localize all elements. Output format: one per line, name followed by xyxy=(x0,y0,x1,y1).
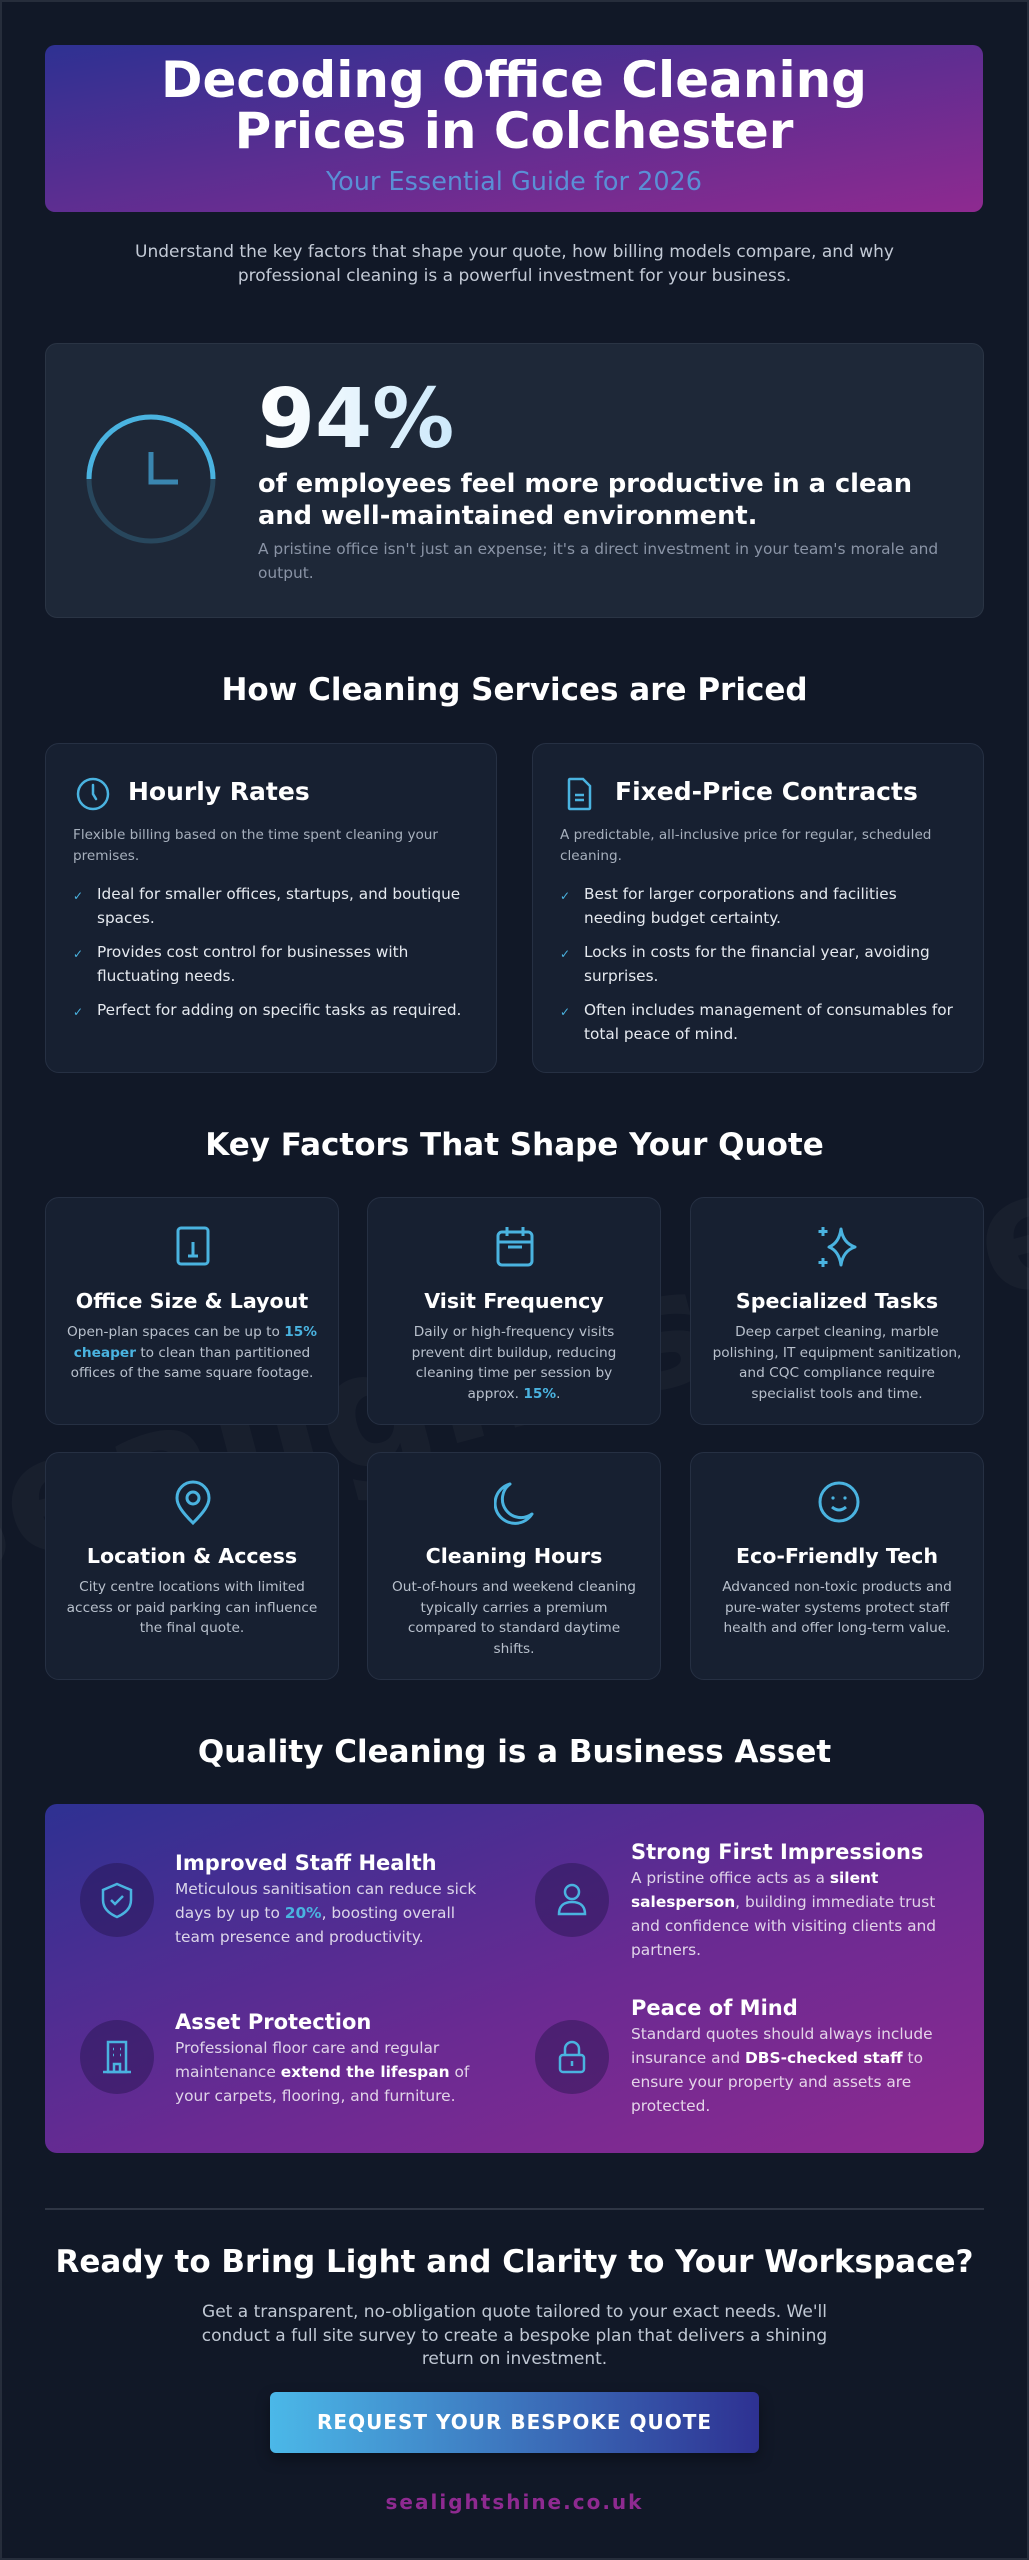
panel: visit frequency: Visit Frequency xyxy=(424,1289,604,1313)
panel: specialized tasks: Deep carpet cleaning, marble xyxy=(735,1324,939,1340)
benefit: peace of mind: insurance and DBS-checked staff to xyxy=(631,2049,923,2067)
panel: fixed-price contracts: ✓ xyxy=(560,889,570,903)
benefit: peace of mind: Peace of Mind xyxy=(631,1996,798,2020)
benefit: staff health: days by up to 20%, boosting overall xyxy=(175,1904,455,1922)
title: Decoding Office Cleaning xyxy=(161,51,867,109)
benefit: first impressions: and confidence with visiting clients and xyxy=(631,1917,936,1935)
panel: specialized tasks: Specialized Tasks xyxy=(736,1289,938,1313)
panel: fixed-price contracts: Often includes management of consumables for xyxy=(584,1001,953,1019)
icon: person xyxy=(535,1863,609,1937)
intro text: Understand the key factors that shape your quote, how billing models compare, and why xyxy=(135,242,894,262)
panel: eco-friendly tech: Eco-Friendly Tech xyxy=(736,1544,938,1568)
title xyxy=(161,51,867,160)
benefit: staff health: Improved Staff Health xyxy=(175,1851,437,1875)
panel: specialized tasks xyxy=(690,1197,984,1425)
panel: location: the final quote. xyxy=(140,1620,244,1636)
panel: hourly rates: ✓ xyxy=(73,889,83,903)
panel: fixed-price contracts: A predictable, all-inclusive price for regular, scheduled xyxy=(560,827,931,843)
CTA text: return on investment. xyxy=(422,2349,607,2369)
panel: visit frequency: prevent dirt buildup, reducing xyxy=(412,1344,616,1360)
panel: hourly rates: fluctuating needs. xyxy=(97,967,235,985)
panel: eco-friendly tech: health and offer long-term value. xyxy=(723,1620,951,1636)
CTA heading: Ready to Bring Light and Clarity to Your Workspace? xyxy=(56,2244,973,2280)
panel: office size: cheaper to clean than partitioned xyxy=(74,1344,310,1360)
panel: cleaning hours: typically carries a premium xyxy=(421,1600,607,1616)
icon: lock xyxy=(535,2020,609,2094)
panel: visit frequency: cleaning time per session by xyxy=(416,1365,612,1381)
icon: smiley xyxy=(818,1482,860,1522)
subtitle: Your Essential Guide for 2026 xyxy=(326,167,702,197)
panel: fixed-price contracts: Locks in costs for the financial year, avoiding xyxy=(584,943,930,961)
CTA button xyxy=(270,2392,759,2453)
benefit: staff health: Meticulous sanitisation can reduce sick xyxy=(175,1880,476,1898)
panel: fixed-price contracts: Best for larger corporations and facilities xyxy=(584,885,897,903)
icon: clock xyxy=(76,778,110,810)
panel: hourly rates: spaces. xyxy=(97,909,155,927)
benefit: peace of mind: ensure your property and assets are xyxy=(631,2073,911,2091)
stat statement xyxy=(258,469,912,531)
stat statement: and well-maintained environment. xyxy=(258,501,757,531)
panel: eco-friendly tech: Advanced non-toxic products and xyxy=(722,1579,952,1595)
panel: visit frequency: Daily or high-frequency visits xyxy=(414,1324,614,1340)
footer website: sealightshine.co.uk xyxy=(386,2490,643,2514)
stat card xyxy=(45,343,984,618)
stat note xyxy=(258,540,938,582)
heading: key factors: Key Factors That Shape Your Quote xyxy=(205,1127,824,1163)
panel: fixed-price contracts: needing budget certainty. xyxy=(584,909,781,927)
panel: hourly rates: Perfect for adding on specific tasks as required. xyxy=(97,1001,461,1019)
panel: hourly rates: ✓ xyxy=(73,1005,83,1019)
panel: office size: Office Size & Layout xyxy=(76,1289,308,1313)
panel: location: City centre locations with limited xyxy=(79,1579,305,1595)
benefit: first impressions: A pristine office acts as a silent xyxy=(631,1869,878,1887)
benefit: first impressions: salesperson, building immediate trust xyxy=(631,1893,935,1911)
benefit: peace of mind xyxy=(535,1996,933,2115)
benefit: peace of mind: protected. xyxy=(631,2097,710,2115)
panel: hourly rates: Provides cost control for businesses with xyxy=(97,943,408,961)
panel: hourly rates xyxy=(45,743,497,1073)
intro text xyxy=(135,242,894,286)
icon: map pin xyxy=(176,1480,210,1525)
icon: sparkles xyxy=(818,1227,856,1267)
icon: shield xyxy=(80,1863,154,1937)
panel: office size: offices of the same square footage. xyxy=(71,1365,313,1381)
CTA text: Get a transparent, no-obligation quote tailored to your exact needs. We'll xyxy=(202,2302,827,2322)
icon: moon xyxy=(494,1482,534,1525)
panel: visit frequency xyxy=(367,1197,661,1425)
panel: fixed-price contracts xyxy=(532,743,984,1073)
benefit: first impressions: Strong First Impressions xyxy=(631,1840,923,1864)
benefit: first impressions: partners. xyxy=(631,1941,701,1959)
panel: eco-friendly tech xyxy=(690,1452,984,1680)
benefit: asset protection: Professional floor care and regular xyxy=(175,2039,439,2057)
stat note: output. xyxy=(258,564,314,582)
icon: document xyxy=(568,778,592,810)
panel: cleaning hours: Out-of-hours and weekend cleaning xyxy=(392,1579,636,1595)
CTA text xyxy=(202,2302,827,2369)
panel: office size xyxy=(45,1197,339,1425)
benefit: asset protection: maintenance extend the lifespan of xyxy=(175,2063,469,2081)
icon: clock xyxy=(86,414,216,544)
panel: business asset benefits xyxy=(45,1804,984,2153)
CTA text: conduct a full site survey to create a bespoke plan that delivers a shining xyxy=(202,2326,827,2346)
stat number: 94% xyxy=(258,372,454,467)
panel: fixed-price contracts: ✓ xyxy=(560,947,570,961)
icon: calendar xyxy=(496,1227,534,1266)
heading: business asset: Quality Cleaning is a Business Asset xyxy=(198,1734,831,1770)
panel: fixed-price contracts: Fixed-Price Contracts xyxy=(615,777,918,806)
CTA button: REQUEST YOUR BESPOKE QUOTE xyxy=(317,2410,712,2434)
stat statement: of employees feel more productive in a clean xyxy=(258,469,912,499)
heading: pricing: How Cleaning Services are Priced xyxy=(221,672,808,708)
panel: hourly rates: ✓ xyxy=(73,947,83,961)
benefit: staff health: team presence and productivity. xyxy=(175,1928,424,1946)
panel: specialized tasks: specialist tools and time. xyxy=(751,1386,923,1402)
panel: hourly rates: Flexible billing based on the time spent cleaning your xyxy=(73,827,438,843)
header banner xyxy=(45,45,983,212)
panel: specialized tasks: and CQC compliance require xyxy=(739,1365,935,1381)
panel: eco-friendly tech: pure-water systems protect staff xyxy=(725,1600,949,1616)
panel: hourly rates: Hourly Rates xyxy=(128,777,310,806)
panel: fixed-price contracts: ✓ xyxy=(560,1005,570,1019)
icon: building xyxy=(80,2020,154,2094)
panel: cleaning hours: compared to standard daytime xyxy=(408,1620,620,1636)
stat note: A pristine office isn't just an expense; it's a direct investment in your team's morale and xyxy=(258,540,938,558)
benefit: staff health xyxy=(80,1851,476,1946)
panel: visit frequency: approx. 15%. xyxy=(468,1386,560,1402)
panel: specialized tasks: polishing, IT equipment sanitization, xyxy=(713,1344,961,1360)
panel: hourly rates: premises. xyxy=(73,848,139,864)
panel: fixed-price contracts: total peace of mind. xyxy=(584,1025,738,1043)
panel: cleaning hours: shifts. xyxy=(493,1640,535,1656)
panel: cleaning hours xyxy=(367,1452,661,1680)
panel: fixed-price contracts: surprises. xyxy=(584,967,658,985)
intro text: professional cleaning is a powerful investment for your business. xyxy=(238,266,791,286)
panel: office size: Open-plan spaces can be up to 15% xyxy=(67,1324,317,1340)
panel: location: Location & Access xyxy=(87,1544,297,1568)
benefit: asset protection: your carpets, flooring, and furniture. xyxy=(175,2087,455,2105)
panel: location: access or paid parking can influence xyxy=(67,1600,317,1616)
benefit: asset protection xyxy=(80,2010,470,2105)
panel: hourly rates: Ideal for smaller offices, startups, and boutique xyxy=(97,885,460,903)
panel: fixed-price contracts: cleaning. xyxy=(560,848,622,864)
benefit: first impressions xyxy=(535,1840,936,1959)
benefit: peace of mind: Standard quotes should always include xyxy=(631,2025,933,2043)
title: Prices in Colchester xyxy=(235,102,793,160)
benefit: asset protection: Asset Protection xyxy=(175,2010,371,2034)
panel: cleaning hours: Cleaning Hours xyxy=(426,1544,602,1568)
panel: location xyxy=(45,1452,339,1680)
icon: tablet xyxy=(176,1226,210,1266)
